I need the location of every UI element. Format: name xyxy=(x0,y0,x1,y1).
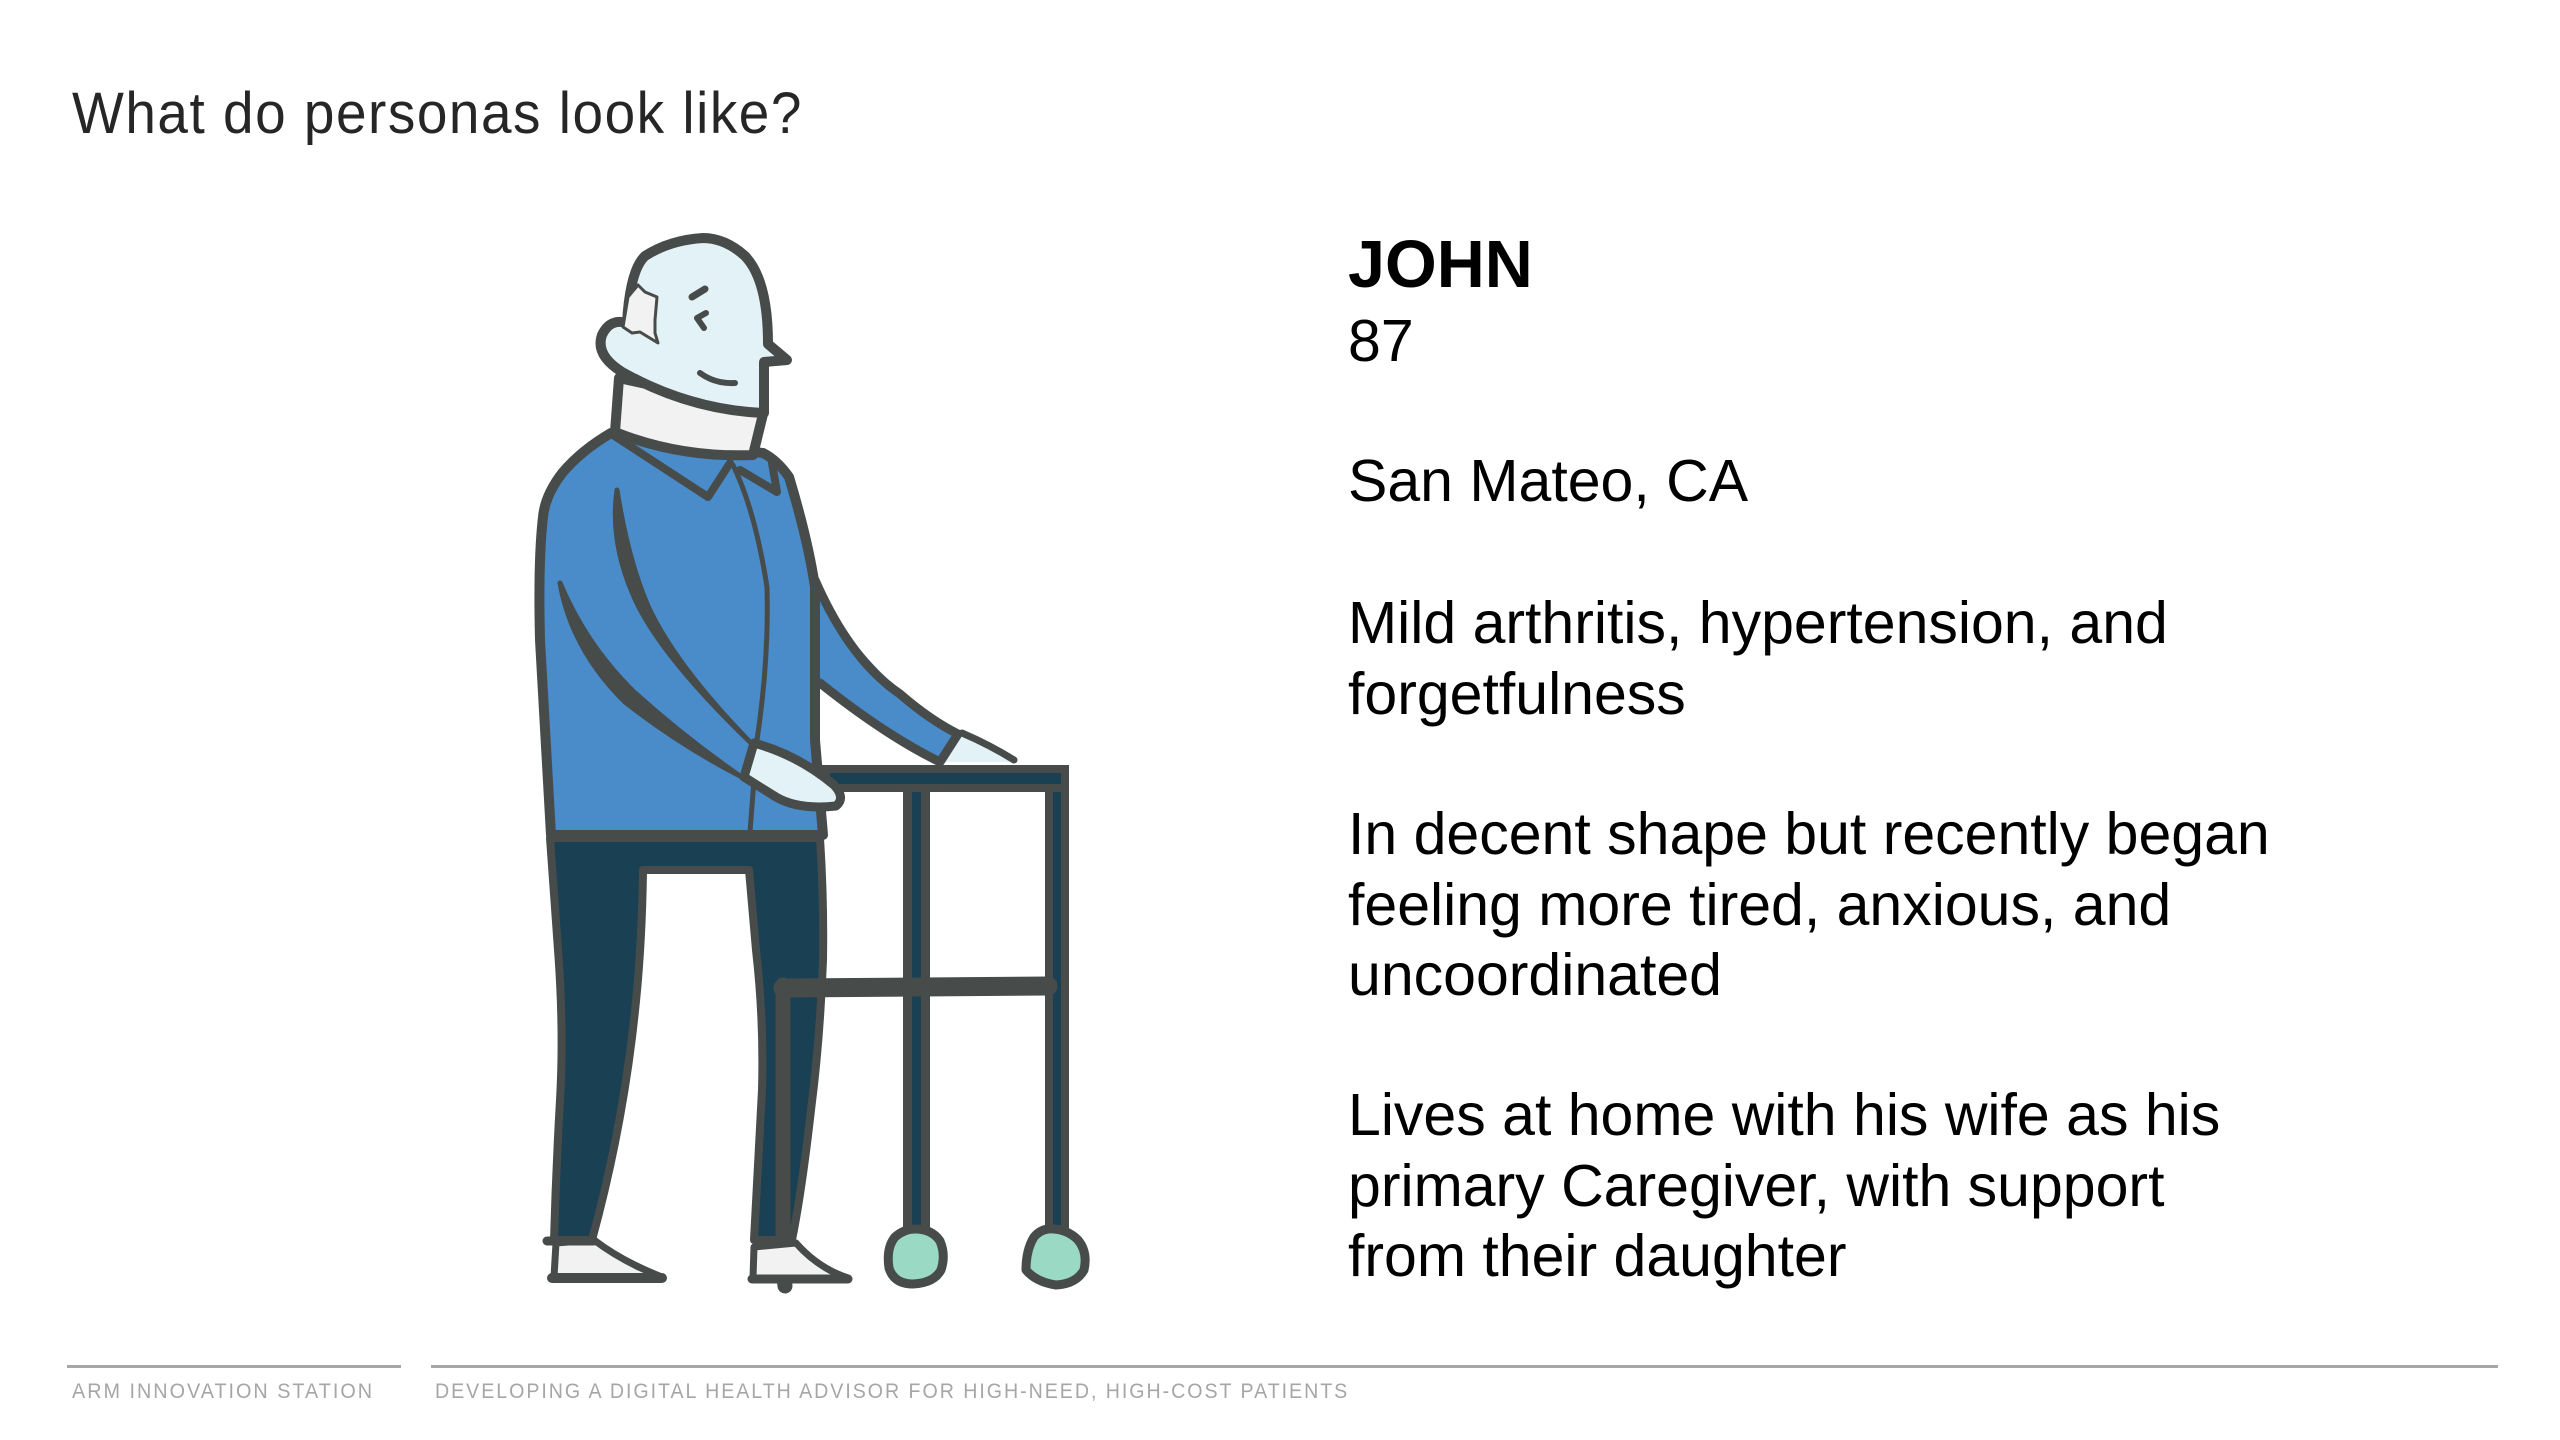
neck xyxy=(615,378,764,455)
conditions: Mild arthritis, hypertension, and xyxy=(1348,590,2168,656)
footer label: organisation: ARM INNOVATION STATION xyxy=(72,1380,374,1403)
ear patch xyxy=(623,285,658,343)
torso xyxy=(539,433,823,835)
living situation xyxy=(1348,1082,2220,1289)
pants xyxy=(550,838,823,1240)
right shoe sole xyxy=(752,1274,848,1284)
right shoe xyxy=(753,1243,848,1278)
current state xyxy=(1348,801,2270,1008)
left shoe xyxy=(554,1240,662,1277)
title: What do personas look like? xyxy=(72,81,803,146)
location: San Mateo, CA xyxy=(1348,448,1748,514)
footer label: project: DEVELOPING A DIGITAL HEALTH ADVISOR FOR HIGH-NEED, HIGH-COST PATIENTS xyxy=(435,1380,1349,1403)
near sleeve line: upper xyxy=(615,490,750,742)
walker wheel: middle xyxy=(888,1229,943,1284)
living situation: primary Caregiver, with support xyxy=(1348,1153,2164,1219)
current state: In decent shape but recently began xyxy=(1348,801,2270,867)
walker wheel: right xyxy=(1026,1229,1085,1285)
footer rule: left xyxy=(67,1365,401,1368)
walker cross bar xyxy=(783,986,1048,988)
walker back frame xyxy=(815,765,1069,1230)
current state: uncoordinated xyxy=(1348,942,1722,1008)
walker front leg xyxy=(783,985,785,1286)
near sleeve line: lower xyxy=(560,583,740,776)
mouth xyxy=(700,373,735,383)
near hand xyxy=(744,743,841,807)
left ankle xyxy=(547,1236,594,1246)
shirt placket xyxy=(733,465,767,832)
age: 87 xyxy=(1348,308,1414,374)
current state: feeling more tired, anxious, and xyxy=(1348,872,2171,938)
head xyxy=(601,238,787,413)
persona details text block xyxy=(1348,228,2270,1289)
living situation: Lives at home with his wife as his xyxy=(1348,1082,2220,1148)
eye xyxy=(697,313,706,328)
conditions xyxy=(1348,590,2168,727)
footer rule: right xyxy=(431,1365,2498,1368)
name: JOHN xyxy=(1348,228,1533,302)
eyebrow xyxy=(692,289,705,297)
collar xyxy=(613,435,777,497)
left shoe sole xyxy=(552,1273,662,1283)
belt line xyxy=(552,832,822,840)
living situation: from their daughter xyxy=(1348,1223,1846,1289)
far arm and hand xyxy=(813,580,1014,762)
conditions: forgetfulness xyxy=(1348,661,1686,727)
